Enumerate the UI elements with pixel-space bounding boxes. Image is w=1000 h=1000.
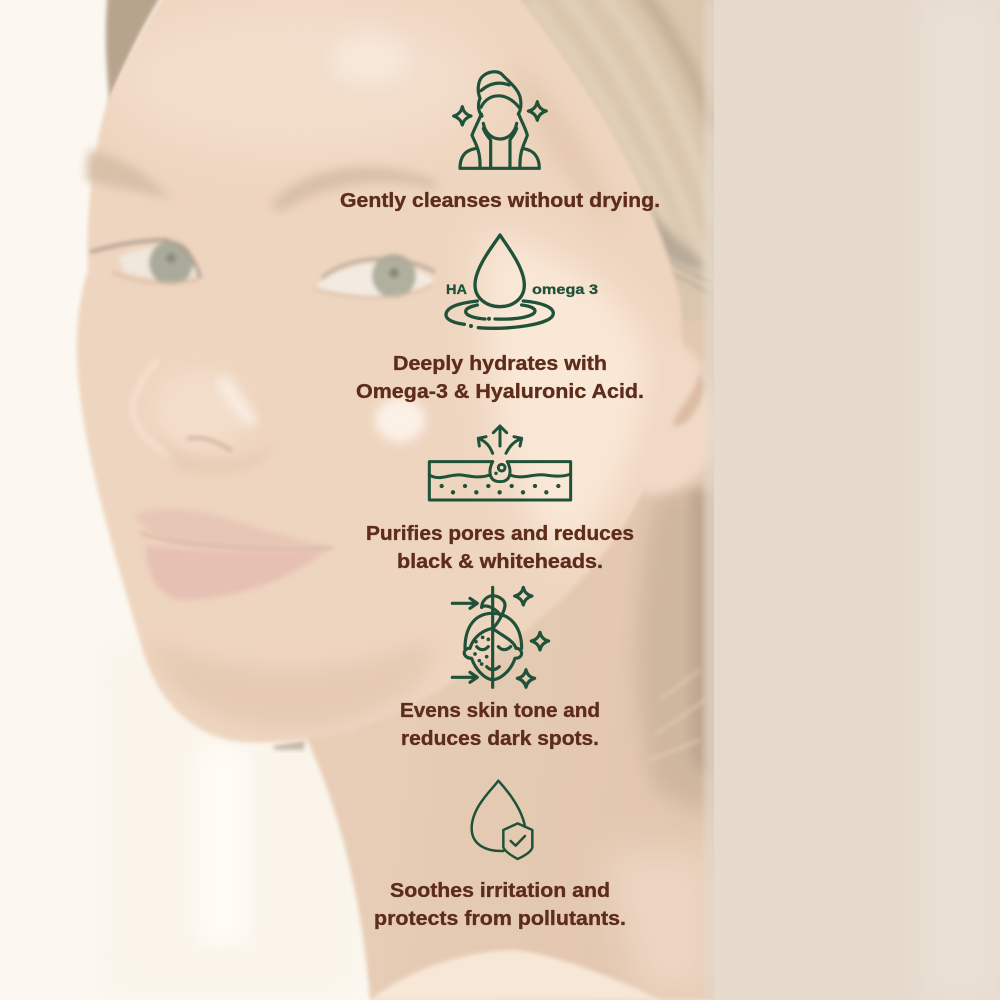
icon: skin pore with arrows (429, 426, 571, 500)
text: hydrates: Deeply hydrates with (393, 352, 607, 375)
cheek highlight (375, 398, 425, 442)
hair fade at panel edge (704, 0, 716, 1000)
eye left (90, 240, 200, 285)
text: purifies: black & whiteheads. (397, 550, 603, 573)
icon: droplet with HA and omega 3: HA (446, 281, 467, 297)
neck highlight near collar (608, 845, 705, 997)
icon: woman with towel (454, 72, 546, 168)
face tones (110, 0, 650, 727)
benefit 4: evens tone (400, 587, 600, 750)
nose (130, 360, 259, 470)
text: evens tone: reduces dark spots. (401, 727, 599, 750)
text: purifies: Purifies pores and reduces (366, 522, 634, 545)
eye right (313, 254, 435, 298)
text: hydrates (356, 352, 644, 403)
icon: half face with spots (452, 587, 549, 687)
text: cleanses: Gently cleanses without drying. (340, 189, 660, 212)
brows (86, 150, 172, 200)
text: soothes (374, 879, 626, 930)
stray hair under jaw (272, 740, 305, 750)
icon: droplet with shield (472, 781, 532, 859)
neck (305, 320, 730, 1000)
face base (77, 0, 682, 743)
icon: droplet with HA and omega 3 (446, 235, 598, 328)
shoulder (370, 950, 660, 1000)
hair (518, 0, 714, 322)
benefit 1: cleanses (340, 72, 660, 212)
lips (136, 509, 333, 600)
text: evens tone: Evens skin tone and (400, 699, 600, 722)
benefit 3: purifies (366, 426, 634, 573)
benefit 5: soothes (374, 781, 626, 930)
benefit 2: hydrates (356, 235, 644, 403)
text: hydrates: Omega-3 & Hyaluronic Acid. (356, 380, 644, 403)
text: soothes: protects from pollutants. (374, 907, 626, 930)
icon: droplet with HA and omega 3: omega 3 (532, 281, 598, 297)
ear (642, 342, 716, 495)
text: soothes: Soothes irritation and (390, 879, 610, 902)
right panel (714, 0, 1000, 1000)
text: purifies (366, 522, 634, 573)
text: evens tone (400, 699, 600, 750)
